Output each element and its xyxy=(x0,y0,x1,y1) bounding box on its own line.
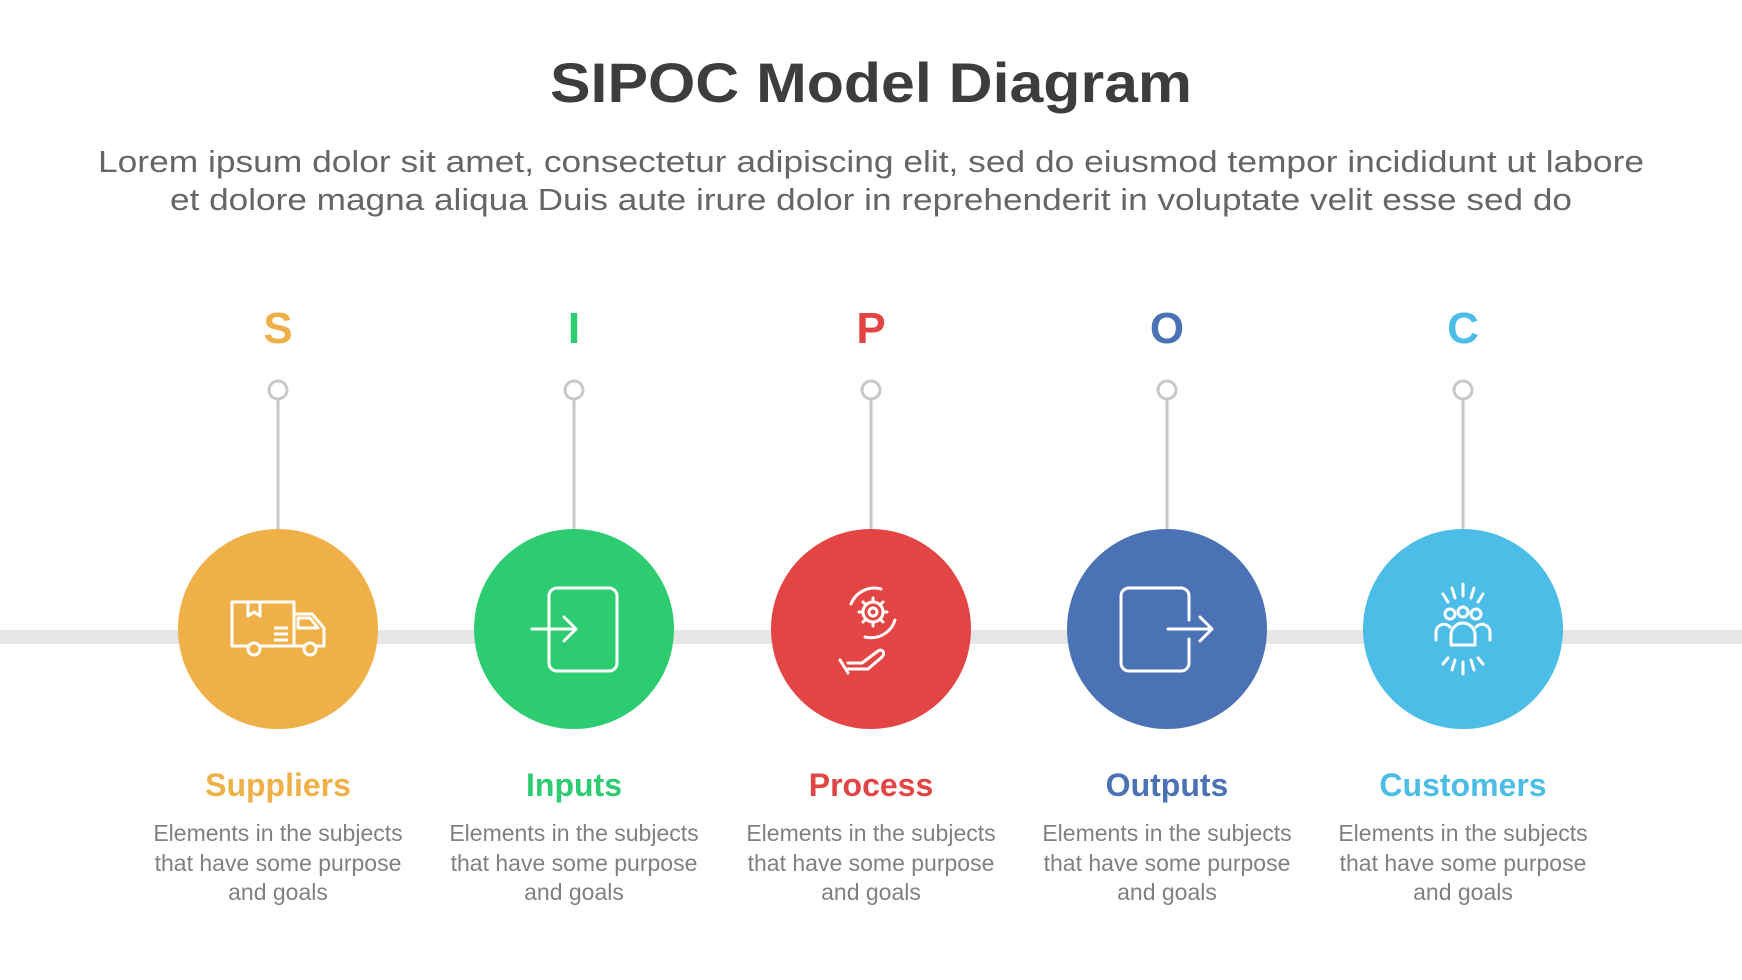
subtitle: Lorem ipsum dolor sit amet, consectetur adipiscing elit, sed do eiusmod tempor incididunt ut labore xyxy=(98,144,1644,179)
step: process: P xyxy=(856,304,886,353)
title: SIPOC Model Diagram xyxy=(550,51,1192,114)
step: suppliers: that have some purpose xyxy=(155,850,401,876)
step: inputs: and goals xyxy=(524,879,624,905)
step: outputs: and goals xyxy=(1117,879,1217,905)
timeline line xyxy=(0,630,1742,644)
step: process: and goals xyxy=(821,879,921,905)
step: customers: Elements in the subjects xyxy=(1338,820,1588,846)
icon: exit xyxy=(1121,588,1212,671)
subtitle: et dolore magna aliqua Duis aute irure dolor in reprehenderit in voluptate velit esse sed do xyxy=(170,182,1572,217)
step: customers xyxy=(1338,304,1588,905)
step: customers: that have some purpose xyxy=(1340,850,1586,876)
step: inputs: that have some purpose xyxy=(451,850,697,876)
icon: people xyxy=(1436,584,1490,674)
step: suppliers: Elements in the subjects xyxy=(153,820,403,846)
step: process: Elements in the subjects xyxy=(746,820,996,846)
step: outputs xyxy=(1042,304,1292,905)
icon: gear in hand xyxy=(840,588,895,673)
step: suppliers: Suppliers xyxy=(205,767,351,803)
step: outputs: that have some purpose xyxy=(1044,850,1290,876)
step: inputs: I xyxy=(568,304,580,353)
subtitle xyxy=(98,144,1644,217)
step: inputs: Elements in the subjects xyxy=(449,820,699,846)
step: suppliers xyxy=(153,304,403,905)
step: suppliers: and goals xyxy=(228,879,328,905)
step: outputs: Elements in the subjects xyxy=(1042,820,1292,846)
step: inputs: Inputs xyxy=(526,767,622,803)
step: process: Process xyxy=(809,767,933,803)
step: outputs: O xyxy=(1150,304,1184,353)
step: customers: Customers xyxy=(1379,767,1547,803)
step: customers: and goals xyxy=(1413,879,1513,905)
step: customers: C xyxy=(1447,304,1479,353)
icon: enter xyxy=(532,588,617,671)
icon: truck xyxy=(232,602,324,655)
step: process: that have some purpose xyxy=(748,850,994,876)
step: inputs xyxy=(449,304,699,905)
step: outputs: Outputs xyxy=(1106,767,1228,803)
step: process xyxy=(746,304,996,905)
step: suppliers: S xyxy=(263,304,293,353)
